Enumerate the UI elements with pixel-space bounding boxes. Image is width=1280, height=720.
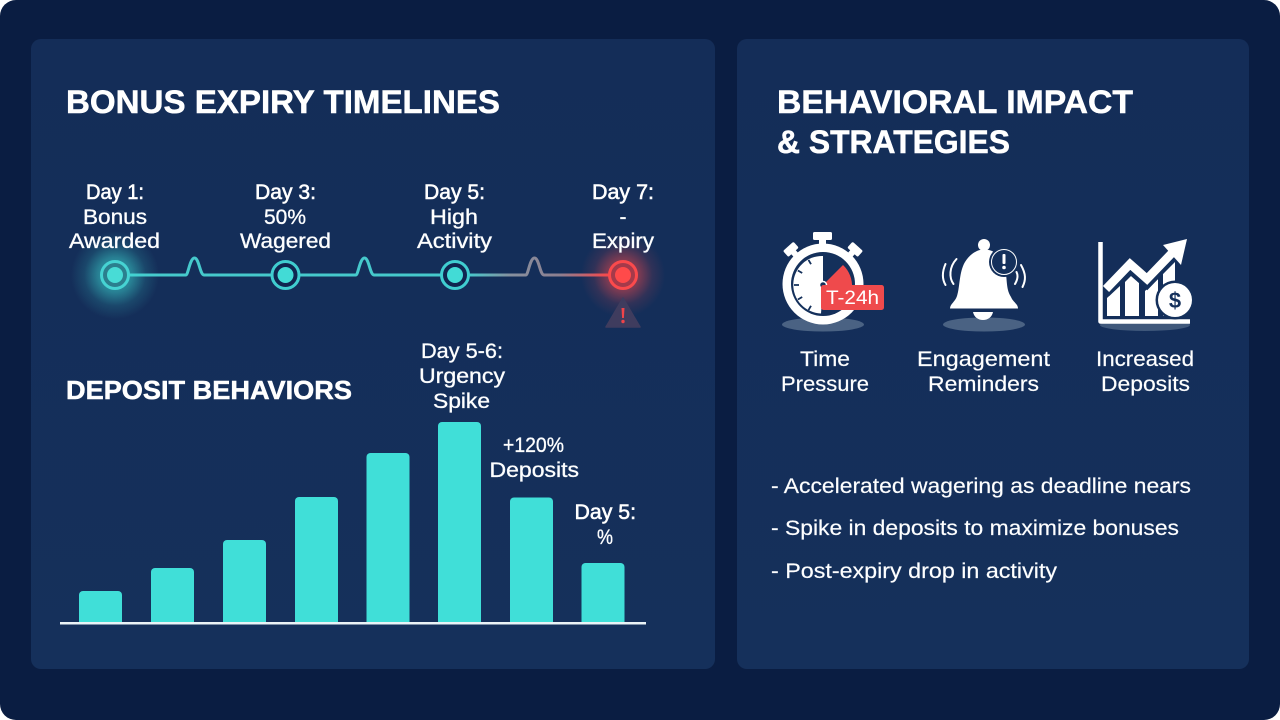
label: day 1: Day 1: [86,181,144,204]
timeline [69,181,665,327]
icon: warning triangle [606,298,640,327]
axis [60,622,646,624]
alert badge [989,247,1019,277]
label: engagement reminders: Engagement [917,348,1050,371]
label: day 7: - [620,206,626,229]
label: day 3: 50% [264,206,306,229]
node: day 7 [581,233,665,317]
trend arrow [1106,239,1187,293]
heading: bonus expiry timelines: BONUS EXPIRY TIMELINES [66,84,500,120]
label: increased deposits [1096,348,1194,396]
chart bars [1107,262,1175,316]
badge: T-24h: T-24h [826,288,879,309]
label: day 5 percent: Day 5: [574,501,636,524]
strategy list: - Accelerated wagering as deadline nears [771,475,1191,498]
icon: stopwatch [782,232,884,332]
label: time pressure: Pressure [781,373,869,396]
vibration arcs [943,259,1025,287]
label: day 1: Bonus [83,206,147,229]
label: day 1: Awarded [69,230,160,253]
heading: behavioral impact and strategies: BEHAVIORAL IMPACT [777,84,1133,120]
icon: growth chart [1100,239,1194,331]
label: day 3: Day 3: [255,181,316,204]
label: day 5 [417,181,493,253]
label: day 7: Day 7: [592,181,654,204]
label: increased deposits: Deposits [1101,373,1190,396]
label: day 5: Activity [417,230,493,253]
heading: behavioral impact and strategies [777,84,1133,160]
heading: deposit behaviors: DEPOSIT BEHAVIORS [66,375,352,405]
label: day 7: Expiry [592,230,655,253]
label: day 7 [592,181,655,253]
label: day 3 [240,181,331,253]
label: engagement reminders: Reminders [928,373,1039,396]
bars [79,422,624,622]
icon: bell [943,239,1025,332]
label: day 5: High [430,206,478,229]
dollar coin: $ [1169,288,1181,313]
strategy list: - Post-expiry drop in activity [771,560,1058,583]
label: deposits increase: +120% [503,434,564,457]
label: deposits increase: Deposits [490,459,579,482]
bar chart [60,340,646,624]
label: day 5 percent: % [597,526,613,549]
strategy list: - Spike in deposits to maximize bonuses [771,517,1179,540]
node: day 5 [442,262,468,288]
label: urgency spike: Day 5-6: [421,340,503,363]
label: increased deposits: Increased [1096,348,1194,371]
timeline line [125,258,612,275]
label: deposits increase [490,434,579,482]
node: day 1 [71,231,159,319]
label: day 5 percent [574,501,636,549]
label: day 5: Day 5: [424,181,485,204]
panel: behavioral impact and strategies [737,39,1249,669]
label: time pressure [781,348,869,396]
label: urgency spike: Spike [433,390,490,413]
label: time pressure: Time [800,348,850,371]
label: engagement reminders [917,348,1050,396]
label: day 3: Wagered [240,230,331,253]
strategy list [771,475,1191,583]
label: day 1 [69,181,160,253]
panel: bonus expiry and deposits [31,39,715,669]
node: day 3 [272,262,299,288]
label: urgency spike [419,340,506,413]
heading: behavioral impact and strategies: & STRATEGIES [777,124,1010,160]
label: urgency spike: Urgency [419,365,506,388]
